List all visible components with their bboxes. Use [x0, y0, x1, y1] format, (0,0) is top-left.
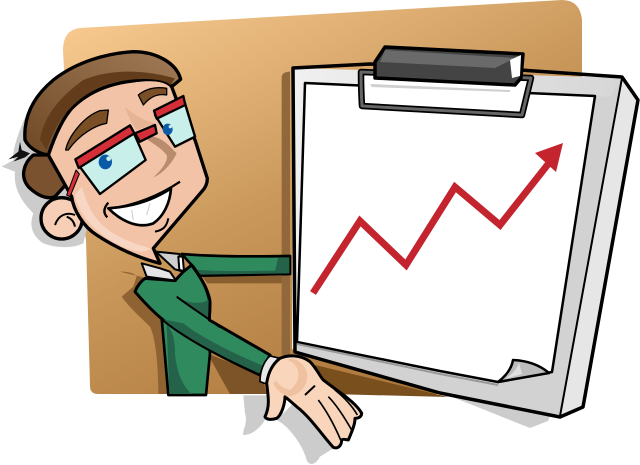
hair tuft — [8, 142, 30, 162]
eyebrows — [66, 88, 167, 150]
man: body — [135, 252, 362, 448]
clip loop — [361, 72, 531, 115]
nose shadow — [143, 136, 177, 177]
torso — [162, 267, 210, 395]
man: head — [2, 52, 207, 263]
hair back bun — [24, 155, 70, 198]
shirt collar — [142, 252, 184, 281]
panel shadows cast by man and board — [120, 72, 290, 394]
hand — [265, 356, 362, 448]
board side face — [560, 78, 638, 416]
shirt cuff — [260, 356, 280, 384]
far sleeve — [182, 254, 290, 276]
board frame — [293, 68, 638, 417]
head shadow on background — [2, 100, 100, 247]
pupils — [99, 124, 173, 169]
chart line: rising red arrow — [313, 143, 563, 293]
panel: tan background — [63, 0, 582, 400]
clip bar — [375, 47, 523, 85]
near arm — [135, 265, 270, 375]
curled paper corner — [498, 360, 549, 382]
paper — [297, 83, 595, 382]
face — [48, 79, 207, 263]
glasses — [67, 96, 195, 197]
ear — [41, 198, 82, 239]
clipboard — [292, 47, 638, 417]
shadows on white background — [243, 395, 552, 464]
smile — [104, 182, 180, 232]
hair — [25, 52, 181, 155]
